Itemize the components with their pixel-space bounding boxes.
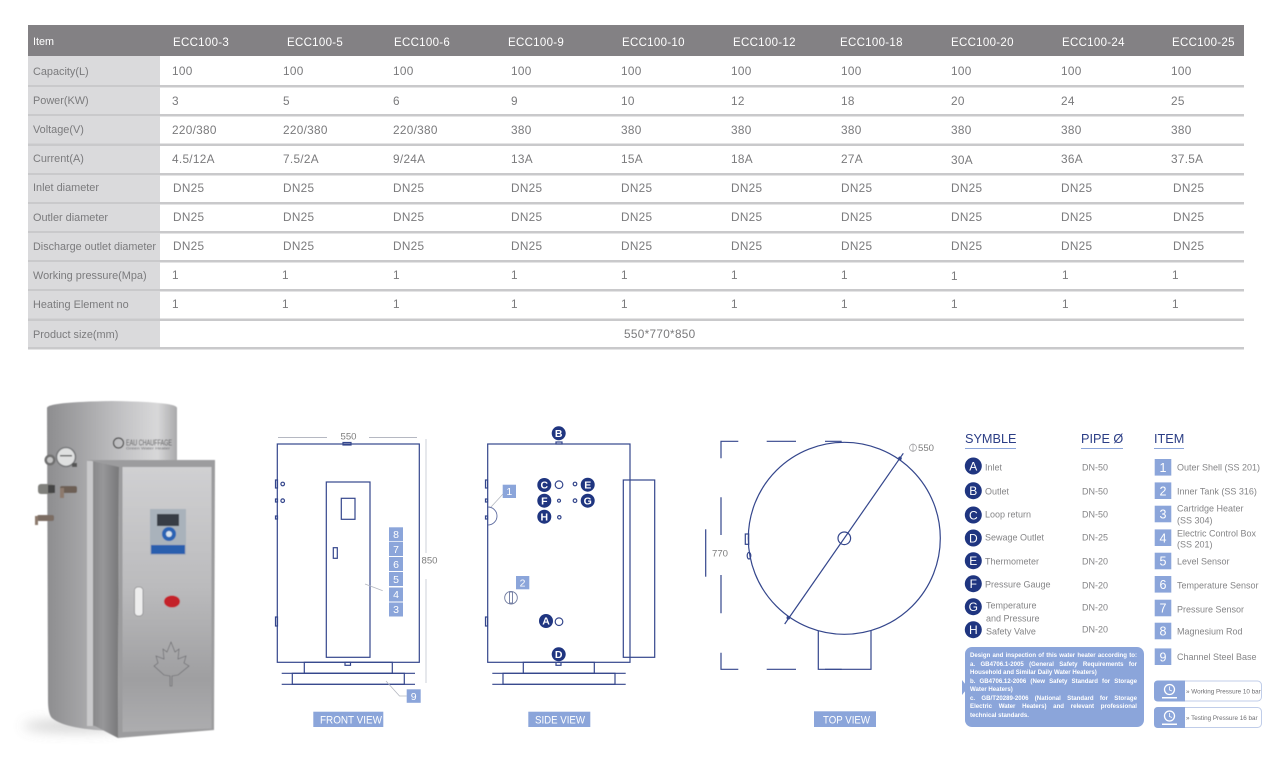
row: current: 13A <box>511 152 533 166</box>
symbol list: C <box>969 508 978 522</box>
symbol list: D <box>969 531 978 545</box>
symbol badges A to H: D <box>555 649 563 661</box>
row: product size: Product size(mm) <box>33 329 118 341</box>
symbol badges A to H: H <box>541 511 548 523</box>
symbol list <box>965 458 1051 638</box>
row: capacity: 100 <box>172 64 193 78</box>
row: voltage <box>28 116 1244 146</box>
row: current: 30A <box>951 153 973 167</box>
row: voltage: 380 <box>841 123 862 137</box>
pipe values: DN-25 <box>1082 532 1108 542</box>
red knob <box>164 596 180 608</box>
pipe values: DN-50 <box>1082 462 1108 472</box>
row: power: 5 <box>283 94 290 108</box>
row: inlet diameter: DN25 <box>1173 181 1204 195</box>
icon: maple leaf <box>154 642 189 686</box>
row: heating element number: 1 <box>172 297 179 311</box>
row: working pressure: 1 <box>1062 268 1069 282</box>
symbol list: and Pressure <box>986 614 1040 624</box>
pipe values: DN-50 <box>1082 486 1108 496</box>
row: current: 7.5/2A <box>283 152 319 166</box>
row: inlet diameter: Inlet diameter <box>33 182 99 194</box>
row: power: 18 <box>841 94 855 108</box>
item list: Cartridge Heater <box>1177 504 1244 514</box>
item badges 8 to 3: 4 <box>393 589 399 601</box>
row: inlet diameter <box>28 175 1244 204</box>
row: voltage: 380 <box>1171 123 1192 137</box>
row: voltage: Voltage(V) <box>33 124 84 136</box>
row: heating element number: 1 <box>621 297 628 311</box>
control box outline <box>818 631 871 669</box>
item badges 8 to 3: 6 <box>393 559 399 571</box>
item list: Level Sensor <box>1177 556 1230 566</box>
item list: 5 <box>1160 555 1167 569</box>
floor shadow <box>23 720 127 732</box>
row: voltage: 380 <box>951 123 972 137</box>
symbol list: Loop return <box>985 510 1031 520</box>
item badges 8 to 3 <box>389 527 403 616</box>
row: capacity: 100 <box>511 64 532 78</box>
port markers <box>555 481 577 626</box>
row: outlet diameter: DN25 <box>951 210 982 224</box>
row: heating element number <box>28 291 1244 321</box>
row: heating element number: 1 <box>841 297 848 311</box>
top view label <box>814 711 876 727</box>
row: heating element number: 1 <box>1062 297 1069 311</box>
row: discharge outlet diameter: DN25 <box>951 239 982 253</box>
dashed bounding frame <box>721 441 842 669</box>
item badges 8 to 3: 7 <box>393 544 399 556</box>
row: working pressure: Working pressure(Mpa) <box>33 270 147 282</box>
row: outlet diameter: DN25 <box>1061 210 1092 224</box>
legend: pipe diameters <box>1081 432 1123 634</box>
row: inlet diameter: DN25 <box>621 181 652 195</box>
row: outlet diameter: DN25 <box>621 210 652 224</box>
item list: 7 <box>1160 602 1167 616</box>
row: capacity <box>28 56 1244 88</box>
row: outlet diameter <box>28 204 1244 234</box>
row: voltage: 220/380 <box>172 123 217 137</box>
symbol list: Inlet <box>985 462 1003 472</box>
row: inlet diameter: DN25 <box>841 181 872 195</box>
row: heating element number: 1 <box>1172 297 1179 311</box>
symbol list: Thermometer <box>985 556 1039 566</box>
symbol badges A to H <box>537 426 595 661</box>
pipe values: DN-20 <box>1082 624 1108 634</box>
row: power <box>28 87 1244 116</box>
standards note: Household and Similar Daily Water Heaters) <box>970 669 1097 676</box>
row: current: 4.5/12A <box>172 152 215 166</box>
row: inlet diameter: DN25 <box>951 181 982 195</box>
row: product size <box>28 321 1244 350</box>
shell and tank cutaway marks <box>488 494 517 604</box>
cabinet side face <box>87 461 119 738</box>
row: discharge outlet diameter: DN25 <box>621 239 652 253</box>
tank circle with diameter line <box>745 442 940 634</box>
row: working pressure: 1 <box>511 268 518 282</box>
table header row: ECC100-12 <box>733 37 796 49</box>
row: discharge outlet diameter: DN25 <box>1061 239 1092 253</box>
front view drawing <box>276 432 438 727</box>
row: discharge outlet diameter: DN25 <box>511 239 542 253</box>
row: working pressure <box>28 262 1244 292</box>
item list: Pressure Sensor <box>1177 604 1244 614</box>
symbol list: Safety Valve <box>986 626 1036 636</box>
item list: 8 <box>1160 625 1167 639</box>
dimension 770: 770 <box>712 548 728 560</box>
row: inlet diameter: DN25 <box>283 181 314 195</box>
row: discharge outlet diameter: DN25 <box>731 239 762 253</box>
item list: 6 <box>1160 578 1167 592</box>
row: voltage: 220/380 <box>393 123 438 137</box>
row: voltage: 380 <box>511 123 532 137</box>
front body outline <box>276 442 419 662</box>
item list: (SS 304) <box>1177 516 1213 526</box>
legend: symbols <box>965 432 1051 638</box>
side body outline <box>486 442 630 665</box>
row: inlet diameter: DN25 <box>511 181 542 195</box>
item badge 9: 9 <box>411 691 417 703</box>
table header row: ECC100-20 <box>951 37 1014 49</box>
dimension diameter 550: 550 <box>918 443 934 454</box>
row: discharge outlet diameter: Discharge outlet diameter <box>33 241 156 253</box>
front dimension 550: 550 <box>340 432 357 442</box>
table header row <box>28 25 1244 56</box>
row: heating element number: 1 <box>731 297 738 311</box>
symbol list: E <box>969 554 977 568</box>
row: inlet diameter: DN25 <box>393 181 424 195</box>
front door with window and handle <box>326 482 370 665</box>
row: outlet diameter: Outler diameter <box>33 212 108 224</box>
symbol list: G <box>969 600 978 614</box>
symbol list: Pressure Gauge <box>985 580 1051 590</box>
row: inlet diameter: DN25 <box>731 181 762 195</box>
row: voltage: 220/380 <box>283 123 328 137</box>
cabinet frame <box>87 460 215 738</box>
item badges 1 and 2: 2 <box>520 578 526 590</box>
symble heading: SYMBLE <box>965 432 1016 446</box>
symbol list: F <box>970 577 977 591</box>
front base <box>282 662 415 684</box>
row: capacity: 100 <box>951 64 972 78</box>
row: working pressure: 1 <box>172 268 179 282</box>
pipe heading: PIPE Ø <box>1081 432 1123 446</box>
row: outlet diameter: DN25 <box>731 210 762 224</box>
table header row: ECC100-5 <box>287 37 343 49</box>
standards note: a. GB4706.1-2005 (General Safety Requirements for <box>970 661 1137 668</box>
dimension 770 <box>706 529 728 577</box>
item heading: ITEM <box>1154 432 1184 446</box>
standards note: technical standards. <box>970 712 1029 719</box>
leader lines <box>365 584 407 696</box>
side control box <box>623 480 655 657</box>
symbol badges A to H: A <box>542 616 550 628</box>
item badges 1 and 2 <box>503 485 529 590</box>
symbol badges A to H: F <box>541 495 548 507</box>
working pressure badge <box>1154 680 1262 702</box>
cylinder tank <box>47 401 177 731</box>
row: discharge outlet diameter: DN25 <box>841 239 872 253</box>
row: heating element number: 1 <box>282 297 289 311</box>
row: current <box>28 146 1244 176</box>
table header row: ECC100-25 <box>1172 37 1235 49</box>
row: current: 27A <box>841 152 863 166</box>
item badges 8 to 3: 3 <box>393 604 399 616</box>
row: outlet diameter: DN25 <box>393 210 424 224</box>
brand logo: EAU CHAUFFAGE <box>126 438 172 448</box>
item list: 9 <box>1160 650 1167 664</box>
item list: 1 <box>1160 461 1167 475</box>
symbol list: H <box>969 623 978 637</box>
top view label: TOP VIEW <box>823 714 871 726</box>
table header row: ECC100-9 <box>508 37 564 49</box>
front view label <box>313 712 383 727</box>
dimension diameter 550 <box>910 443 934 454</box>
table header row: Item <box>33 36 54 48</box>
table header row: ECC100-18 <box>840 37 903 49</box>
item list: 2 <box>1160 484 1167 498</box>
row: capacity: Capacity(L) <box>33 66 89 78</box>
standards note: c. GB/T20289-2006 (National Standard for Storage <box>970 695 1137 702</box>
row: current: 9/24A <box>393 152 425 166</box>
row: current: 18A <box>731 152 753 166</box>
symbol badges A to H: B <box>555 428 563 440</box>
product photo: water heater <box>23 401 215 738</box>
brand logo <box>114 438 172 450</box>
item badges 8 to 3: 8 <box>393 529 399 541</box>
top view drawing <box>706 441 940 727</box>
item list: Magnesium Rod <box>1177 626 1243 636</box>
row: heating element number: 1 <box>393 297 400 311</box>
standards note: Electric Water Heaters) and relevant professional <box>970 703 1137 710</box>
row: working pressure: 1 <box>951 269 958 283</box>
table header row: ECC100-6 <box>394 37 450 49</box>
brand logo: Green Water Heater <box>126 446 171 450</box>
side view label <box>528 712 590 727</box>
row: power: 3 <box>172 94 179 108</box>
row: working pressure: 1 <box>621 268 628 282</box>
row: power: 6 <box>393 94 400 108</box>
row: voltage: 380 <box>1061 123 1082 137</box>
side view label: SIDE VIEW <box>535 714 586 726</box>
item list: 4 <box>1160 531 1167 545</box>
row: outlet diameter: DN25 <box>1173 210 1204 224</box>
row: inlet diameter: DN25 <box>173 181 204 195</box>
item list: Electric Control Box <box>1177 528 1257 538</box>
control panel <box>150 509 186 555</box>
row: voltage: 380 <box>731 123 752 137</box>
row: power: 10 <box>621 94 635 108</box>
front dimension 850: 850 <box>421 556 438 566</box>
standards note <box>965 647 1144 727</box>
row: current: 37.5A <box>1171 152 1203 166</box>
row: current: 15A <box>621 152 643 166</box>
table header row: ECC100-3 <box>173 37 229 49</box>
note arrow <box>962 680 968 695</box>
row: power: 25 <box>1171 94 1185 108</box>
row: power: Power(KW) <box>33 95 89 107</box>
row: capacity: 100 <box>621 64 642 78</box>
symbol badges A to H: C <box>541 480 549 492</box>
symbol list: Outlet <box>985 486 1010 496</box>
item badges 8 to 3: 5 <box>393 574 399 586</box>
row: power: 20 <box>951 94 965 108</box>
front dimension 550 <box>278 432 417 442</box>
standards note: b. GB4706.12-2006 (New Safety Standard for Storage <box>970 678 1137 685</box>
row: discharge outlet diameter: DN25 <box>393 239 424 253</box>
symbol list: A <box>969 459 977 473</box>
row: capacity: 100 <box>1061 64 1082 78</box>
row: power: 24 <box>1061 94 1075 108</box>
symbol list: B <box>969 484 977 498</box>
pipe values: DN-20 <box>1082 602 1108 612</box>
row: heating element number: Heating Element no <box>33 299 129 311</box>
row: heating element number: 1 <box>511 297 518 311</box>
row: voltage: 380 <box>621 123 642 137</box>
row: capacity: 100 <box>1171 64 1192 78</box>
row: working pressure: 1 <box>1172 268 1179 282</box>
item badge 9 <box>407 689 421 703</box>
pipe values: DN-50 <box>1082 510 1108 520</box>
row: power: 12 <box>731 94 745 108</box>
row: current: 36A <box>1061 152 1083 166</box>
row: discharge outlet diameter: DN25 <box>1173 239 1204 253</box>
pipe values: DN-20 <box>1082 556 1108 566</box>
item list: Channel Steel Base <box>1177 652 1257 662</box>
side view drawing <box>486 426 655 727</box>
symbol badges A to H: G <box>584 495 592 507</box>
symbol list: Sewage Outlet <box>985 532 1045 542</box>
item badges 1 and 2: 1 <box>506 486 512 498</box>
item list: (SS 201) <box>1177 540 1213 550</box>
door handle <box>134 587 143 616</box>
side base <box>492 662 626 684</box>
row: discharge outlet diameter: DN25 <box>283 239 314 253</box>
testing pressure badge: » Testing Pressure 16 bar <box>1186 715 1258 722</box>
row: inlet diameter: DN25 <box>1061 181 1092 195</box>
row: outlet diameter: DN25 <box>173 210 204 224</box>
row: product size: 550*770*850 <box>624 327 696 341</box>
row: outlet diameter: DN25 <box>511 210 542 224</box>
row: capacity: 100 <box>393 64 414 78</box>
standards note: Water Heaters) <box>970 686 1013 693</box>
pipe values <box>1082 462 1108 634</box>
item list: Temperature Sensor <box>1177 580 1259 590</box>
row: power: 9 <box>511 94 518 108</box>
row: discharge outlet diameter <box>28 233 1244 262</box>
item list <box>1155 459 1260 665</box>
table header row: ECC100-10 <box>622 37 685 49</box>
row: working pressure: 1 <box>731 268 738 282</box>
row: capacity: 100 <box>841 64 862 78</box>
table header row: ECC100-24 <box>1062 37 1125 49</box>
row: working pressure: 1 <box>393 268 400 282</box>
pipe fittings and gauge <box>35 448 77 525</box>
row: outlet diameter: DN25 <box>283 210 314 224</box>
symbol badges A to H: E <box>584 479 591 491</box>
row: capacity: 100 <box>731 64 752 78</box>
specification table <box>28 25 1244 350</box>
front view label: FRONT VIEW <box>320 714 383 726</box>
pipe values: DN-20 <box>1082 580 1108 590</box>
row: heating element number: 1 <box>951 297 958 311</box>
row: discharge outlet diameter: DN25 <box>173 239 204 253</box>
standards note: Design and inspection of this water heater according to: <box>970 652 1137 659</box>
row: working pressure: 1 <box>282 268 289 282</box>
item list: Outer Shell (SS 201) <box>1177 462 1260 472</box>
row: capacity: 100 <box>283 64 304 78</box>
row: current: Current(A) <box>33 153 84 165</box>
working pressure badge: » Working Pressure 10 bar <box>1186 688 1261 695</box>
cabinet door face <box>122 467 212 732</box>
item list: 3 <box>1160 508 1167 522</box>
item list: Inner Tank (SS 316) <box>1177 486 1257 496</box>
symbol list: Temperature <box>986 600 1037 610</box>
legend: items <box>1154 432 1260 665</box>
row: working pressure: 1 <box>841 268 848 282</box>
row: outlet diameter: DN25 <box>841 210 872 224</box>
testing pressure badge <box>1154 707 1262 728</box>
